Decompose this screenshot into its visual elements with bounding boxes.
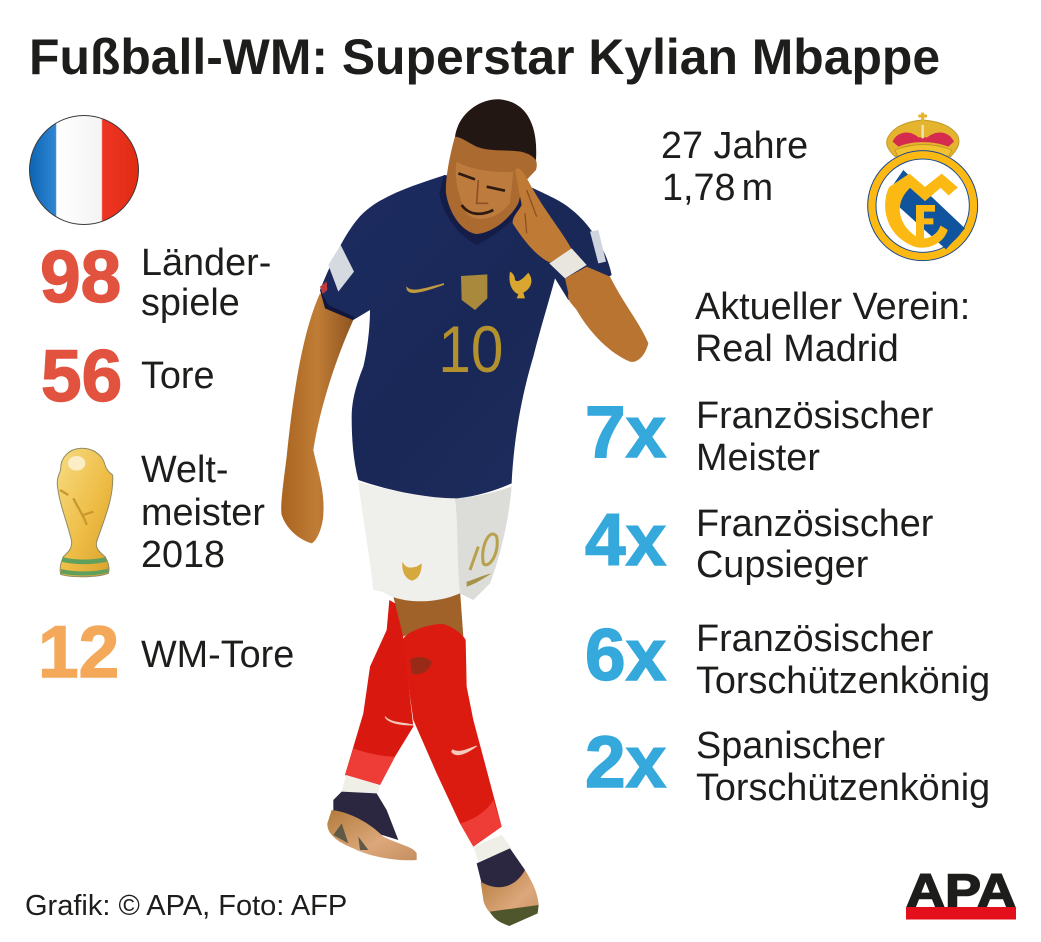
stat: French cup winner: 4x [585,500,667,581]
stat: world champion: Welt- [141,449,228,491]
stat: French champion: Französischer [696,395,933,437]
sleeve cuff [320,290,355,320]
stat: Spanish top scorer [585,722,990,809]
stat: caps: 98 [40,237,121,318]
eyes and mouth [458,173,505,214]
stat: Spanish top scorer: Torschützenkönig [696,767,990,809]
swoosh [407,284,444,292]
front leg sock [403,624,502,847]
stat: age and height: 27 Jahre [661,125,808,167]
wrist bandage [549,248,587,278]
text: current club: Aktueller Verein: [695,286,970,328]
stat: French top scorer: 6x [585,615,667,696]
saluting hand [513,168,572,263]
stat: world champion: meister [141,492,265,534]
stat: French champion [585,392,933,479]
blue band [886,170,965,249]
stat: world champion [141,449,265,576]
knee skin [393,590,463,637]
stat: age and height: 1,78m [662,167,773,209]
icon: French flag circle [30,116,138,224]
icon: World Cup trophy [57,448,113,577]
stat: goals: Tore [141,355,215,397]
source credit: Grafik: © APA, Foto: AFP [25,890,347,922]
stat: World Cup goals: WM-Tore [141,634,294,676]
back leg sock [345,600,413,785]
face [446,127,537,234]
icon: Real Madrid crest [868,113,978,261]
text: current club [695,286,970,370]
stat: goals [41,336,215,417]
title: Fußball-WM: Superstar Kylian Mbappe [29,29,940,85]
stat: French champion: 7x [585,392,667,473]
logo: APA: APA [906,864,1016,917]
collar [439,175,528,245]
F monogram [916,205,935,243]
jersey number: 10 [438,313,503,386]
crown [887,113,959,157]
shirt [320,175,612,498]
hair [455,99,536,160]
back boot [327,792,417,860]
stat: French top scorer: Französischer [696,618,933,660]
left arm [281,293,353,543]
ring [872,155,974,257]
stat: caps: Länder- [141,242,271,284]
stat: French cup winner: Cupsieger [696,544,868,586]
back sleeve print [590,230,606,263]
stat: caps: spiele [141,282,240,324]
stat: French cup winner [585,500,933,586]
photo: Kylian Mbappe player cutout [281,99,648,926]
stat: World Cup goals [38,612,294,693]
finger lines [525,190,537,233]
M and C monogram [885,174,957,247]
stat: French cup winner: Französischer [696,503,933,545]
shorts [358,482,512,601]
stat: caps [40,237,271,324]
stat: age and height [661,125,808,209]
front boot [477,848,539,926]
stat: goals: 56 [41,336,122,417]
stat: World Cup goals: 12 [38,612,119,693]
face highlight [456,162,513,219]
stat: world champion: 2018 [141,534,225,576]
sleeve badge [328,245,354,292]
champion badge [461,274,487,310]
right forearm [565,267,648,362]
stat: French champion: Meister [696,437,820,479]
stat: French top scorer [585,615,990,702]
rooster crest [509,272,531,298]
text: current club: Real Madrid [695,328,899,370]
stat: Spanish top scorer: 2x [585,722,667,803]
stat: French top scorer: Torschützenkönig [696,660,990,702]
nose shadow [477,180,488,203]
stat: Spanish top scorer: Spanischer [696,725,885,767]
